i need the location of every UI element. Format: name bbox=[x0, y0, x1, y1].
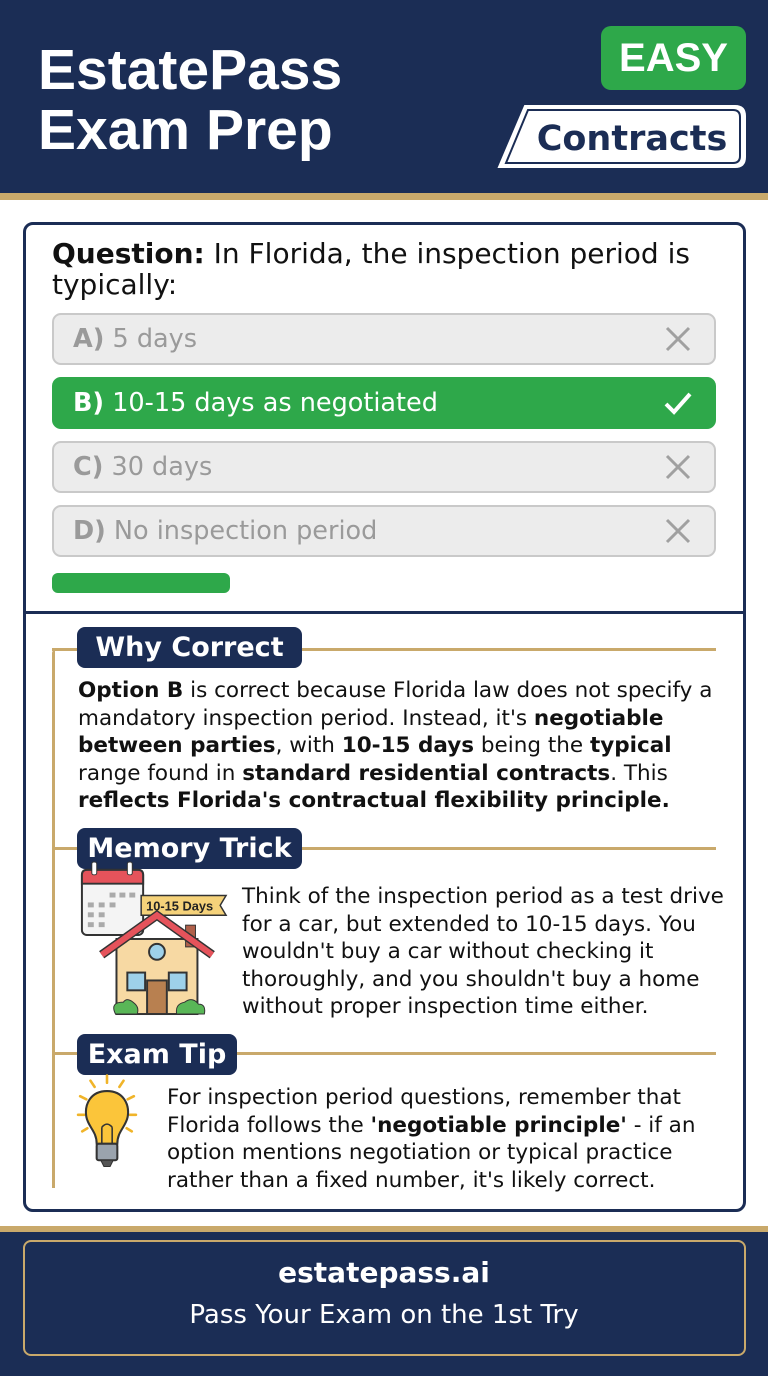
icon: lightbulb bbox=[76, 1074, 138, 1167]
badge: easy bbox=[601, 26, 746, 90]
text: why correct: Option B is correct because Florida law does not specify a mandatory inspection period. Instead, it's negotiable between parties, with 10-15 days being the typical range found in standard residential contracts. This reflects Florida's contractual flexibility principle. bbox=[78, 678, 712, 813]
option B bbox=[52, 377, 716, 429]
heading: memory trick: Memory Trick bbox=[87, 833, 292, 864]
title: Exam Prep bbox=[38, 98, 333, 162]
icon: calendar house bbox=[80, 862, 228, 1016]
heading: exam tip bbox=[77, 1034, 237, 1075]
badge: contracts: Contracts bbox=[537, 119, 727, 159]
text: exam tip: For inspection period questions, remember that Florida follows the 'negotiable principle' - if an option mentions negotiation or typical practice rather than a fixed number, it's likely correct. bbox=[167, 1085, 695, 1192]
heading: why correct bbox=[77, 627, 302, 668]
option D: D) No inspection period bbox=[73, 516, 377, 546]
option A: A) 5 days bbox=[73, 324, 197, 354]
option C bbox=[52, 441, 716, 493]
panel: question card bbox=[23, 222, 746, 1212]
title bbox=[38, 38, 342, 162]
badge: easy: EASY bbox=[619, 36, 728, 80]
footer bbox=[0, 1226, 768, 1376]
icon: calendar house: 10-15 Days bbox=[146, 898, 213, 913]
option C: C) 30 days bbox=[73, 452, 212, 482]
footer text bbox=[189, 1256, 579, 1330]
progress bar bbox=[52, 573, 230, 593]
heading: why correct: Why Correct bbox=[95, 632, 284, 663]
text: memory trick: Think of the inspection period as a test drive for a car, but extended to 10-15 days. You wouldn't buy a car without checking it thoroughly, and you shouldn't buy a home without proper inspection time either. bbox=[242, 884, 724, 1019]
option B: B) 10-15 days as negotiated bbox=[73, 388, 438, 418]
heading: memory trick bbox=[77, 828, 302, 869]
badge: contracts bbox=[498, 105, 746, 168]
option D bbox=[52, 505, 716, 557]
title: EstatePass bbox=[38, 38, 342, 102]
question: Question: In Florida, the inspection period is typically: bbox=[52, 237, 690, 301]
heading: exam tip: Exam Tip bbox=[88, 1039, 226, 1070]
footer text: Pass Your Exam on the 1st Try bbox=[189, 1300, 579, 1330]
option A bbox=[52, 313, 716, 365]
footer text: estatepass.ai bbox=[278, 1256, 490, 1289]
header bbox=[0, 0, 768, 200]
